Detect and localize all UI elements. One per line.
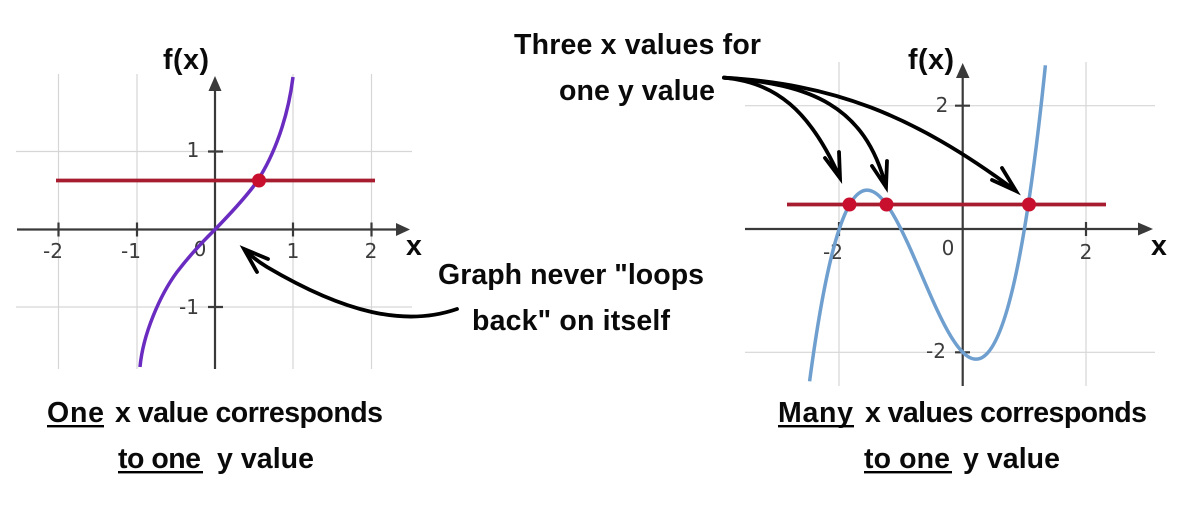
callout: three x values	[514, 29, 761, 107]
left axis title x: x	[406, 230, 422, 262]
right tick labels: 2	[1080, 240, 1092, 264]
right axis title f(x): f(x)	[908, 44, 954, 76]
right tick labels: 0	[942, 236, 954, 260]
caption: right	[778, 397, 1147, 475]
callout: graph never loops back	[438, 259, 704, 337]
left tick labels: 2	[365, 239, 377, 263]
intersection points	[842, 198, 1036, 212]
panel: right graph	[745, 44, 1167, 386]
left tick labels: -1	[179, 295, 199, 319]
left tick labels: 1	[287, 239, 299, 263]
panel: left graph	[16, 44, 422, 369]
red horizontal line	[787, 203, 1106, 206]
callout: three x values: Three x values for	[514, 29, 761, 61]
right tick labels: -2	[926, 339, 946, 363]
caption: right: Many	[778, 397, 853, 429]
left tick labels: 1	[187, 138, 199, 162]
arrows: three x values	[724, 78, 1016, 191]
left tick labels	[43, 138, 377, 319]
right axis title x: x	[1151, 230, 1167, 262]
left axis title f(x): f(x)	[163, 44, 209, 76]
arrow: never loops back	[244, 249, 457, 317]
right tick labels: 2	[936, 93, 948, 117]
caption: left: One	[47, 397, 104, 429]
red horizontal line	[56, 179, 375, 182]
caption: left	[47, 397, 383, 475]
right axes	[745, 63, 1153, 386]
left axes	[17, 76, 410, 369]
left tick labels: -1	[121, 239, 141, 263]
callout: graph never loops back: Graph never "loops	[438, 259, 704, 291]
arrow to second point	[724, 78, 887, 187]
callout: graph never loops back: back" on itself	[472, 305, 670, 337]
purple curve	[140, 77, 293, 367]
blue curve	[810, 65, 1045, 381]
left tick labels: 0	[194, 237, 206, 261]
caption: left: to one	[118, 443, 201, 475]
right tick labels: -2	[823, 240, 843, 264]
right tick labels	[823, 93, 1092, 363]
caption: left: y value	[217, 443, 314, 475]
caption: right: to one	[864, 443, 950, 475]
arrow to third point	[724, 78, 1016, 191]
caption: right: x values corresponds	[865, 397, 1147, 429]
intersection point	[252, 174, 266, 188]
caption: left: x value corresponds	[115, 397, 383, 429]
left tick labels: -2	[43, 239, 63, 263]
arrow to first point	[724, 78, 840, 178]
callout: three x values: one y value	[559, 75, 715, 107]
caption: right: y value	[963, 443, 1060, 475]
